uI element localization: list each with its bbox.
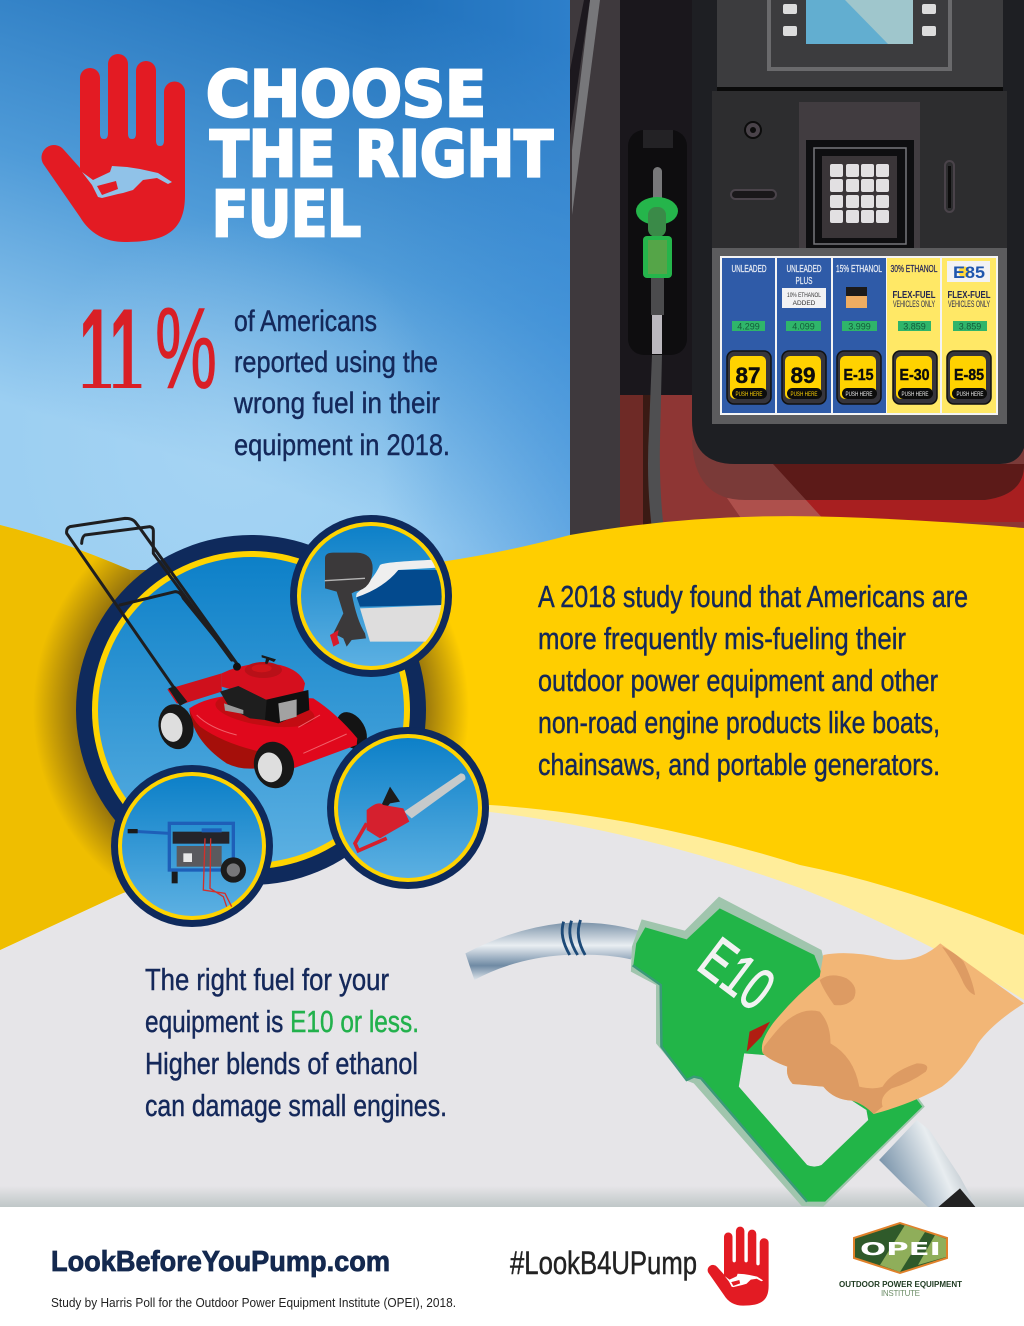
- statistic 11%: 11: [79, 282, 143, 424]
- flex fuel labels: [892, 289, 991, 309]
- display screen: [769, 0, 950, 69]
- title: [206, 58, 553, 251]
- grade labels: UNLEADED: [732, 263, 767, 275]
- grade labels: [732, 263, 938, 287]
- grade button 89: PUSH HERE: [790, 391, 818, 398]
- title: FUEL: [212, 178, 361, 251]
- right fuel text block: [145, 962, 447, 1123]
- icon: mower handle: [67, 518, 237, 692]
- pale yellow wave: [0, 800, 1024, 1000]
- grade button 89: 89: [790, 363, 816, 388]
- hose collar rings: [562, 920, 585, 955]
- floor shadow: [0, 1186, 1024, 1207]
- E15 warning sticker: [846, 287, 867, 308]
- price displays: 4.099: [792, 322, 815, 332]
- grade button 87: [727, 351, 771, 404]
- grade labels: 15% ETHANOL: [836, 263, 882, 275]
- title: THE RIGHT: [210, 118, 553, 191]
- website url: LookBeforeYouPump.com: [51, 1246, 390, 1278]
- pump shadow on red base: [692, 440, 1024, 524]
- OPEI logo: INSTITUTE: [881, 1289, 920, 1298]
- statistic description: wrong fuel in their: [233, 387, 440, 420]
- grade button 87: PUSH HERE: [736, 391, 763, 398]
- study text block: [538, 579, 968, 782]
- title: CHOOSE: [206, 58, 486, 131]
- icon: chainsaw: [355, 773, 465, 851]
- E85 badge: [947, 261, 990, 282]
- right fuel text block: Higher blends of ethanol: [145, 1046, 418, 1081]
- hashtag: #LookB4UPump: [510, 1245, 697, 1281]
- hose: [465, 923, 642, 980]
- flex fuel labels: VEHICLES ONLY: [948, 299, 990, 309]
- OPEI logo: OPEI: [860, 1239, 941, 1260]
- price displays: 3.859: [903, 322, 926, 332]
- right fuel text block: equipment is E10 or less.: [145, 1004, 419, 1039]
- price displays: 4.299: [737, 322, 760, 332]
- OPEI logo: OUTDOOR POWER EQUIPMENT: [839, 1280, 962, 1289]
- grade button E-15: [837, 351, 881, 404]
- yellow wave band: [0, 492, 1024, 960]
- E85 badge: E85: [953, 263, 985, 282]
- statistic description: of Americans: [234, 305, 377, 338]
- statistic description: reported using the: [234, 346, 438, 379]
- statistic description: equipment in 2018.: [234, 429, 450, 462]
- 10% ethanol added sticker: ADDED: [793, 300, 816, 307]
- price displays: 3.859: [959, 322, 981, 332]
- grade labels: 30% ETHANOL: [890, 263, 938, 275]
- equipment circles group: [67, 515, 489, 927]
- nozzle holster: [628, 130, 687, 530]
- price displays: 3.999: [848, 322, 871, 332]
- E10 fuel nozzle held by hand: [465, 897, 1024, 1210]
- study text block: more frequently mis-fueling their: [538, 621, 906, 656]
- E10 label: E10: [687, 925, 787, 1023]
- nozzle body: [631, 897, 925, 1207]
- grade button E-15: E-15: [844, 367, 874, 384]
- study text block: outdoor power equipment and other: [538, 663, 938, 698]
- footer: [0, 1207, 1024, 1326]
- icon: red stop hand: [42, 54, 185, 242]
- circle: portable generator: [111, 765, 273, 927]
- grade button E-85: [947, 351, 991, 404]
- statistic 11%: [82, 308, 215, 389]
- fuel pump illustration: [570, 0, 1024, 540]
- icon: generator: [128, 823, 246, 907]
- main circle: lawn mower: [67, 518, 426, 885]
- pump body: [692, 0, 1024, 464]
- fuel selector panel: [712, 248, 1007, 424]
- right fuel text block: can damage small engines.: [145, 1088, 447, 1123]
- grade labels: PLUS: [796, 275, 812, 287]
- grade button E-15: PUSH HERE: [846, 391, 873, 398]
- grade button E-85: PUSH HERE: [956, 391, 984, 398]
- OPEI logo: [839, 1223, 962, 1298]
- trigger: [747, 1022, 770, 1052]
- icon: outboard motor and boat: [325, 553, 443, 647]
- statistic description: [233, 305, 450, 462]
- circle: boat motor: [290, 515, 452, 677]
- grade button E-30: E-30: [900, 367, 930, 384]
- statistic 11%: %: [155, 285, 217, 413]
- hand: [762, 943, 1024, 1114]
- grey lower background: [0, 780, 1024, 1207]
- card reader details: [731, 122, 954, 212]
- icon: small stop hand: [708, 1227, 769, 1306]
- grade button E-30: PUSH HERE: [902, 391, 929, 398]
- flex fuel labels: FLEX-FUEL: [892, 289, 936, 301]
- lower nozzle metal: [879, 1120, 978, 1210]
- grade button 87: 87: [736, 363, 760, 388]
- grade button E-85: E-85: [954, 367, 984, 384]
- price displays: [732, 321, 987, 332]
- 10% ethanol added sticker: 10% ETHANOL: [787, 292, 821, 299]
- 10% ethanol added sticker: [782, 288, 826, 308]
- grade button 89: [782, 351, 826, 404]
- keypad: [799, 102, 920, 248]
- grade labels: UNLEADED: [786, 263, 822, 275]
- flex fuel labels: FLEX-FUEL: [948, 289, 991, 301]
- study text block: chainsaws, and portable generators.: [538, 747, 940, 782]
- source note: Study by Harris Poll for the Outdoor Power Equipment Institute (OPEI), 2018.: [51, 1295, 456, 1310]
- circle: chainsaw: [327, 727, 489, 889]
- right fuel text block: The right fuel for your: [145, 962, 389, 997]
- grade button E-30: [893, 351, 937, 404]
- flex fuel labels: VEHICLES ONLY: [893, 299, 935, 309]
- icon: lawn mower: [154, 655, 373, 792]
